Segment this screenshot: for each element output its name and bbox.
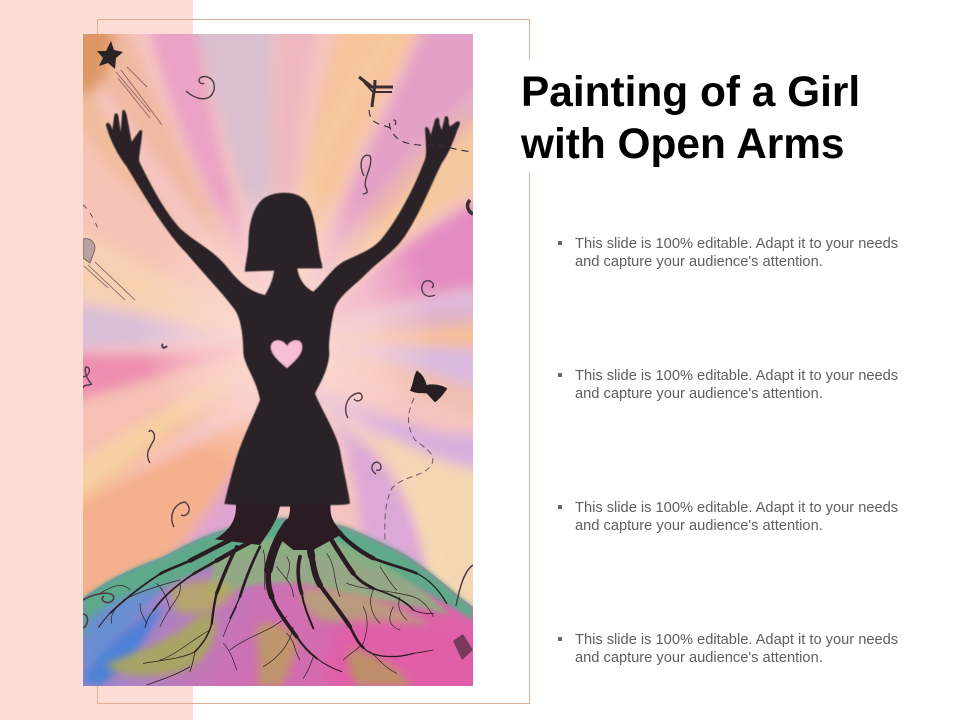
star with tail (97, 41, 162, 125)
decorative frame (97, 19, 530, 704)
title (511, 60, 871, 172)
right rays (287, 70, 500, 340)
heart cut-out (271, 340, 302, 368)
bullet 4: and capture your audience's attention. (575, 650, 823, 666)
center glow (137, 180, 437, 480)
top rays (40, 10, 287, 340)
butterfly with dashed trail (385, 371, 447, 540)
roots (98, 503, 447, 685)
bullet 1: and capture your audience's attention. (575, 254, 823, 270)
hill: green edge (83, 518, 473, 640)
bullet 4 (558, 632, 898, 666)
bullet 2: This slide is 100% editable. Adapt it to your needs (575, 368, 898, 384)
dragonfly with dashed trail (359, 77, 473, 152)
swirls (83, 76, 473, 628)
left rays (40, 10, 287, 340)
hill (83, 518, 480, 700)
legs (215, 503, 343, 550)
title: with Open Arms (521, 120, 844, 167)
top-left brown corner (53, 0, 113, 94)
bullet 1: This slide is 100% editable. Adapt it to your needs (575, 236, 898, 252)
left pink band (0, 0, 193, 720)
girl silhouette (106, 110, 460, 507)
hill: teal and olive dabs (205, 536, 450, 615)
bullet 4: This slide is 100% editable. Adapt it to your needs (575, 632, 898, 648)
painted rays background (40, 10, 500, 710)
bullet 2 (558, 368, 898, 402)
fine twigs (100, 550, 433, 678)
bullet 3 (558, 500, 898, 534)
bullet 1 (558, 236, 898, 270)
bullet 2: and capture your audience's attention. (575, 386, 823, 402)
title: Painting of a Girl (521, 68, 860, 115)
bullet 3: This slide is 100% editable. Adapt it to your needs (575, 500, 898, 516)
paint streaks (83, 34, 473, 590)
heart doodle with tail (83, 239, 135, 300)
spool and edge mark (453, 200, 473, 660)
bullet 3: and capture your audience's attention. (575, 518, 823, 534)
painting: girl with open arms (83, 34, 473, 686)
